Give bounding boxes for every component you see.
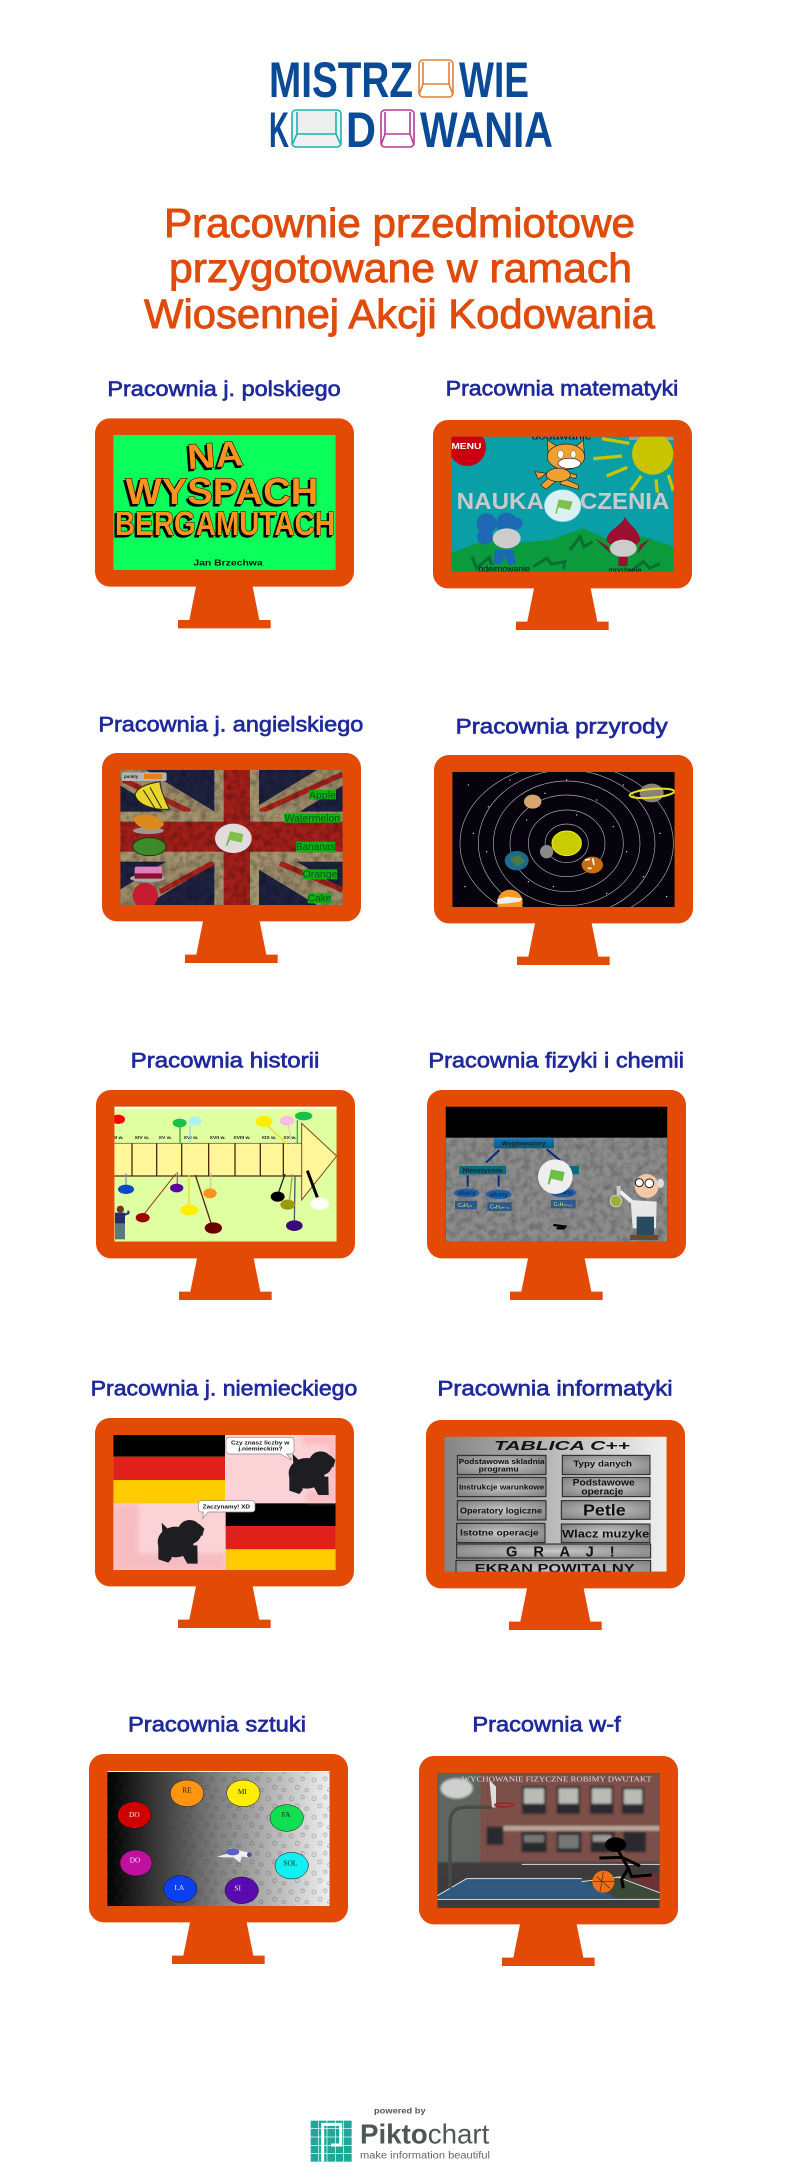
screen: German flags and puppies: Zaczynamy! XD xyxy=(203,1504,250,1510)
icon: magenta key xyxy=(381,110,414,147)
logo line: D: D xyxy=(346,102,376,158)
powered by: powered by xyxy=(374,2105,426,2115)
logo line: WIE: WIE xyxy=(459,52,529,108)
screen: Nauka liczenia: MENU xyxy=(451,441,481,451)
screen: Tablica C++: Podstawowe xyxy=(573,1478,635,1488)
monitor xyxy=(95,1418,354,1628)
screen: Nauka liczenia: CZENIA xyxy=(580,488,669,514)
monitor xyxy=(419,1756,678,1966)
screen: musical notes: SOL xyxy=(283,1859,298,1868)
screen: timeline: XIV w. xyxy=(135,1135,150,1141)
screen: hydrocarbons on the moon: CₙH₂ₙ₊₂ xyxy=(554,1202,573,1208)
screen: Na wyspach Bergamutach: Jan Brzechwa xyxy=(193,558,263,568)
screen: musical notes: DO xyxy=(129,1810,140,1819)
screen: Na wyspach Bergamutach xyxy=(113,434,336,570)
wordmark: Piktochart xyxy=(360,2118,490,2149)
screen: hydrocarbons on the moon xyxy=(446,1107,667,1242)
panel: Pracownia j. angielskiego xyxy=(98,712,363,963)
screen: Nauka liczenia: mnożenie xyxy=(608,565,642,575)
screen: timeline: XVIII w. xyxy=(233,1135,251,1141)
heading: Pracownia przyrody xyxy=(456,714,668,738)
screen: Tablica C++: Operatory logiczne xyxy=(460,1506,543,1515)
title: Pracownie przedmiotowe xyxy=(164,200,635,246)
screen: musical notes: MI xyxy=(238,1787,247,1796)
screen: Tablica C++: Wlacz muzyke xyxy=(562,1529,649,1541)
icon: puppy xyxy=(158,1520,204,1564)
screen: German flags and puppies: j.niemieckim? xyxy=(237,1447,283,1453)
screen: Na wyspach Bergamutach: BERGAMUTACH xyxy=(115,505,335,543)
screen: Tablica C++: G R A J ! xyxy=(506,1544,615,1560)
monitor xyxy=(102,753,361,963)
screen: Nauka liczenia: dodawanie xyxy=(532,431,592,442)
logo line: MISTRZ: MISTRZ xyxy=(269,52,413,108)
screen: basketball court: WYCHOWANIE FIZYCZNE ROBIMY DWUTAKT xyxy=(462,1774,652,1783)
screen: timeline: XIX w. xyxy=(262,1135,277,1141)
screen: musical notes: DO xyxy=(130,1856,140,1865)
screen: hydrocarbons on the moon: alkiny xyxy=(489,1191,509,1198)
monitor xyxy=(95,418,354,628)
screen: hydrocarbons on the moon: Nienasycone xyxy=(463,1167,503,1174)
heading: Pracownia informatyki xyxy=(437,1377,673,1401)
screen: musical notes: LA xyxy=(174,1883,185,1892)
monitor xyxy=(433,420,692,630)
heading: Pracownia fizyki i chemii xyxy=(428,1048,684,1072)
screen: timeline: XX w. xyxy=(283,1135,297,1141)
logo line: WANIA: WANIA xyxy=(420,102,553,158)
heading: Pracownia w-f xyxy=(472,1713,621,1737)
screen: German flags and puppies: Czy znasz liczby w xyxy=(231,1440,290,1446)
screen: hydrocarbons on the moon: alkeny xyxy=(457,1190,477,1197)
panel: Pracownia historii xyxy=(96,1048,355,1300)
screen: Nauka liczenia: NAUKA xyxy=(457,488,544,514)
screen: union jack fruit game: Watermelon xyxy=(285,814,340,825)
icon: teal key xyxy=(292,110,341,147)
screen: musical notes: SI xyxy=(234,1884,241,1893)
panel: Pracownia matematyki xyxy=(433,376,692,630)
screen: hydrocarbons on the moon: CₙH₂ₙ₋₂ xyxy=(490,1205,509,1211)
screen: hydrocarbons on the moon: CₙH₂ₙ xyxy=(458,1203,472,1209)
screen: basketball court xyxy=(437,1773,660,1908)
screen: solar system xyxy=(452,772,675,907)
screen: union jack fruit game: Orange xyxy=(303,869,337,880)
heading: Pracownia j. angielskiego xyxy=(98,712,363,736)
screen: hydrocarbons on the moon: alkany xyxy=(554,1190,573,1197)
panel: Pracownia przyrody xyxy=(434,714,693,965)
screen: Na wyspach Bergamutach: WYSPACH xyxy=(126,470,318,512)
icon: Piktochart mark xyxy=(311,2121,352,2162)
screen: Tablica C++: operacje xyxy=(581,1486,623,1496)
heading: Pracownia sztuki xyxy=(128,1713,306,1737)
screen: musical notes xyxy=(107,1771,330,1906)
logo: Mistrzowie Kodowania xyxy=(269,52,553,158)
screen: Tablica C++: Typy danych xyxy=(573,1459,632,1469)
screen: Nauka liczenia xyxy=(449,429,674,575)
screen: union jack fruit game: Bananas xyxy=(296,842,336,853)
monitor xyxy=(89,1754,348,1964)
logo line: K: K xyxy=(269,102,289,158)
screen: timeline xyxy=(112,1107,337,1242)
screen: Tablica C++: EKRAN POWITALNY xyxy=(475,1561,636,1575)
screen: Tablica C++: TABLICA C++ xyxy=(494,1439,631,1453)
panel: Pracownia sztuki xyxy=(89,1713,348,1964)
screen: union jack fruit game: punkty xyxy=(124,774,139,779)
screen: musical notes: RE xyxy=(182,1786,192,1795)
screen: timeline: II w. xyxy=(114,1135,124,1141)
screen: timeline: XV w. xyxy=(159,1135,172,1141)
screen: Tablica C++: Petle xyxy=(583,1502,626,1519)
title xyxy=(144,200,655,337)
icon: orange key xyxy=(419,60,453,97)
heading: Pracownia j. polskiego xyxy=(107,377,341,401)
screen: Tablica C++: Istotne operacje xyxy=(460,1528,539,1538)
title: Wiosennej Akcji Kodowania xyxy=(144,291,655,337)
screen: Tablica C++: Podstawowa skladnia xyxy=(459,1457,546,1466)
screen: German flags and puppies xyxy=(113,1435,336,1570)
icon: puppy xyxy=(289,1451,335,1495)
screen: Nauka liczenia: odejmowanie xyxy=(478,564,530,574)
screen: union jack fruit game xyxy=(120,770,343,908)
monitor xyxy=(426,1420,685,1630)
screen: union jack fruit game: Apple xyxy=(309,790,336,801)
tagline: make information beautiful xyxy=(360,2151,490,2162)
screen: Tablica C++: Instrukcje warunkowe xyxy=(459,1482,544,1491)
screen: Tablica C++: programu xyxy=(479,1464,519,1473)
heading: Pracownia matematyki xyxy=(446,376,678,400)
panel: Pracownia j. polskiego xyxy=(95,377,354,628)
screen: Na wyspach Bergamutach: NA xyxy=(186,434,245,477)
footer: Piktochart logo xyxy=(311,2105,490,2162)
title: przygotowane w ramach xyxy=(169,245,632,291)
monitor xyxy=(427,1090,686,1300)
panel: Pracownia w-f xyxy=(419,1713,678,1966)
heading: Pracownia j. niemieckiego xyxy=(91,1377,357,1401)
screen: timeline: XVI w. xyxy=(184,1135,199,1141)
screen: musical notes: FA xyxy=(282,1810,291,1819)
monitor xyxy=(434,755,693,965)
screen: union jack fruit game: Cake xyxy=(308,894,331,905)
panel: Pracownia informatyki xyxy=(426,1377,685,1630)
monitor xyxy=(96,1090,355,1300)
screen: timeline: XVII w. xyxy=(210,1135,226,1141)
panel: Pracownia fizyki i chemii xyxy=(427,1048,686,1300)
heading: Pracownia historii xyxy=(131,1048,319,1072)
panel: Pracownia j. niemieckiego xyxy=(91,1377,357,1628)
screen: Tablica C++ xyxy=(444,1437,667,1577)
screen: hydrocarbons on the moon: Węglowodory xyxy=(502,1140,546,1147)
